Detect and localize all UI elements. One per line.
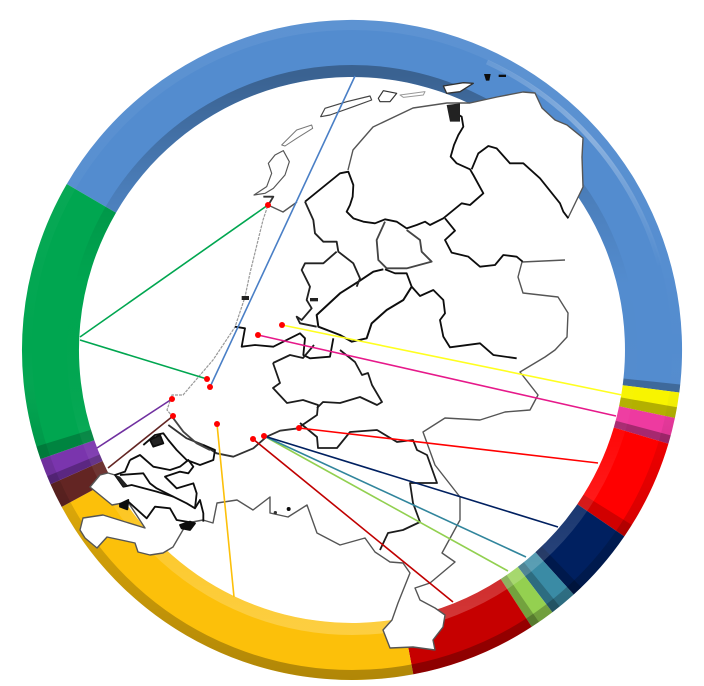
location dots [169,202,302,442]
segment: green [22,184,116,459]
segment: dark red [403,579,532,674]
leader: teal [264,436,526,557]
map: northern provinces and Wadden islands [235,74,568,358]
leader: dark red [253,439,453,602]
map: central and southern provinces [273,345,437,550]
segment: brown [50,461,112,507]
leader: green to south [80,340,207,379]
leader: purple [97,399,172,448]
segment: yellow [619,385,679,418]
segment: purple [40,440,103,484]
map: land area [80,92,583,650]
leader: navy [264,436,558,527]
leader: blue [210,76,355,387]
leader: light green [264,436,508,571]
leader: red [299,428,598,463]
leader: brown [108,416,173,468]
map: west coast [167,205,268,417]
segment: navy [535,504,624,594]
map: Rhine delta and Zeeland waterways [115,418,298,530]
segment: pink [614,406,675,444]
map: north and east borders [80,92,583,650]
leader: green to north [80,205,268,337]
segment: teal [518,552,574,612]
leader: pink [258,335,616,416]
segment: blue [67,20,682,392]
segment: red [577,428,668,536]
map of the Netherlands [80,74,583,650]
segment: light green [501,567,552,627]
leader: yellow [282,325,622,395]
leader: gold [217,424,234,597]
leader lines with red location dots [80,76,622,602]
segment: gold [62,480,413,680]
